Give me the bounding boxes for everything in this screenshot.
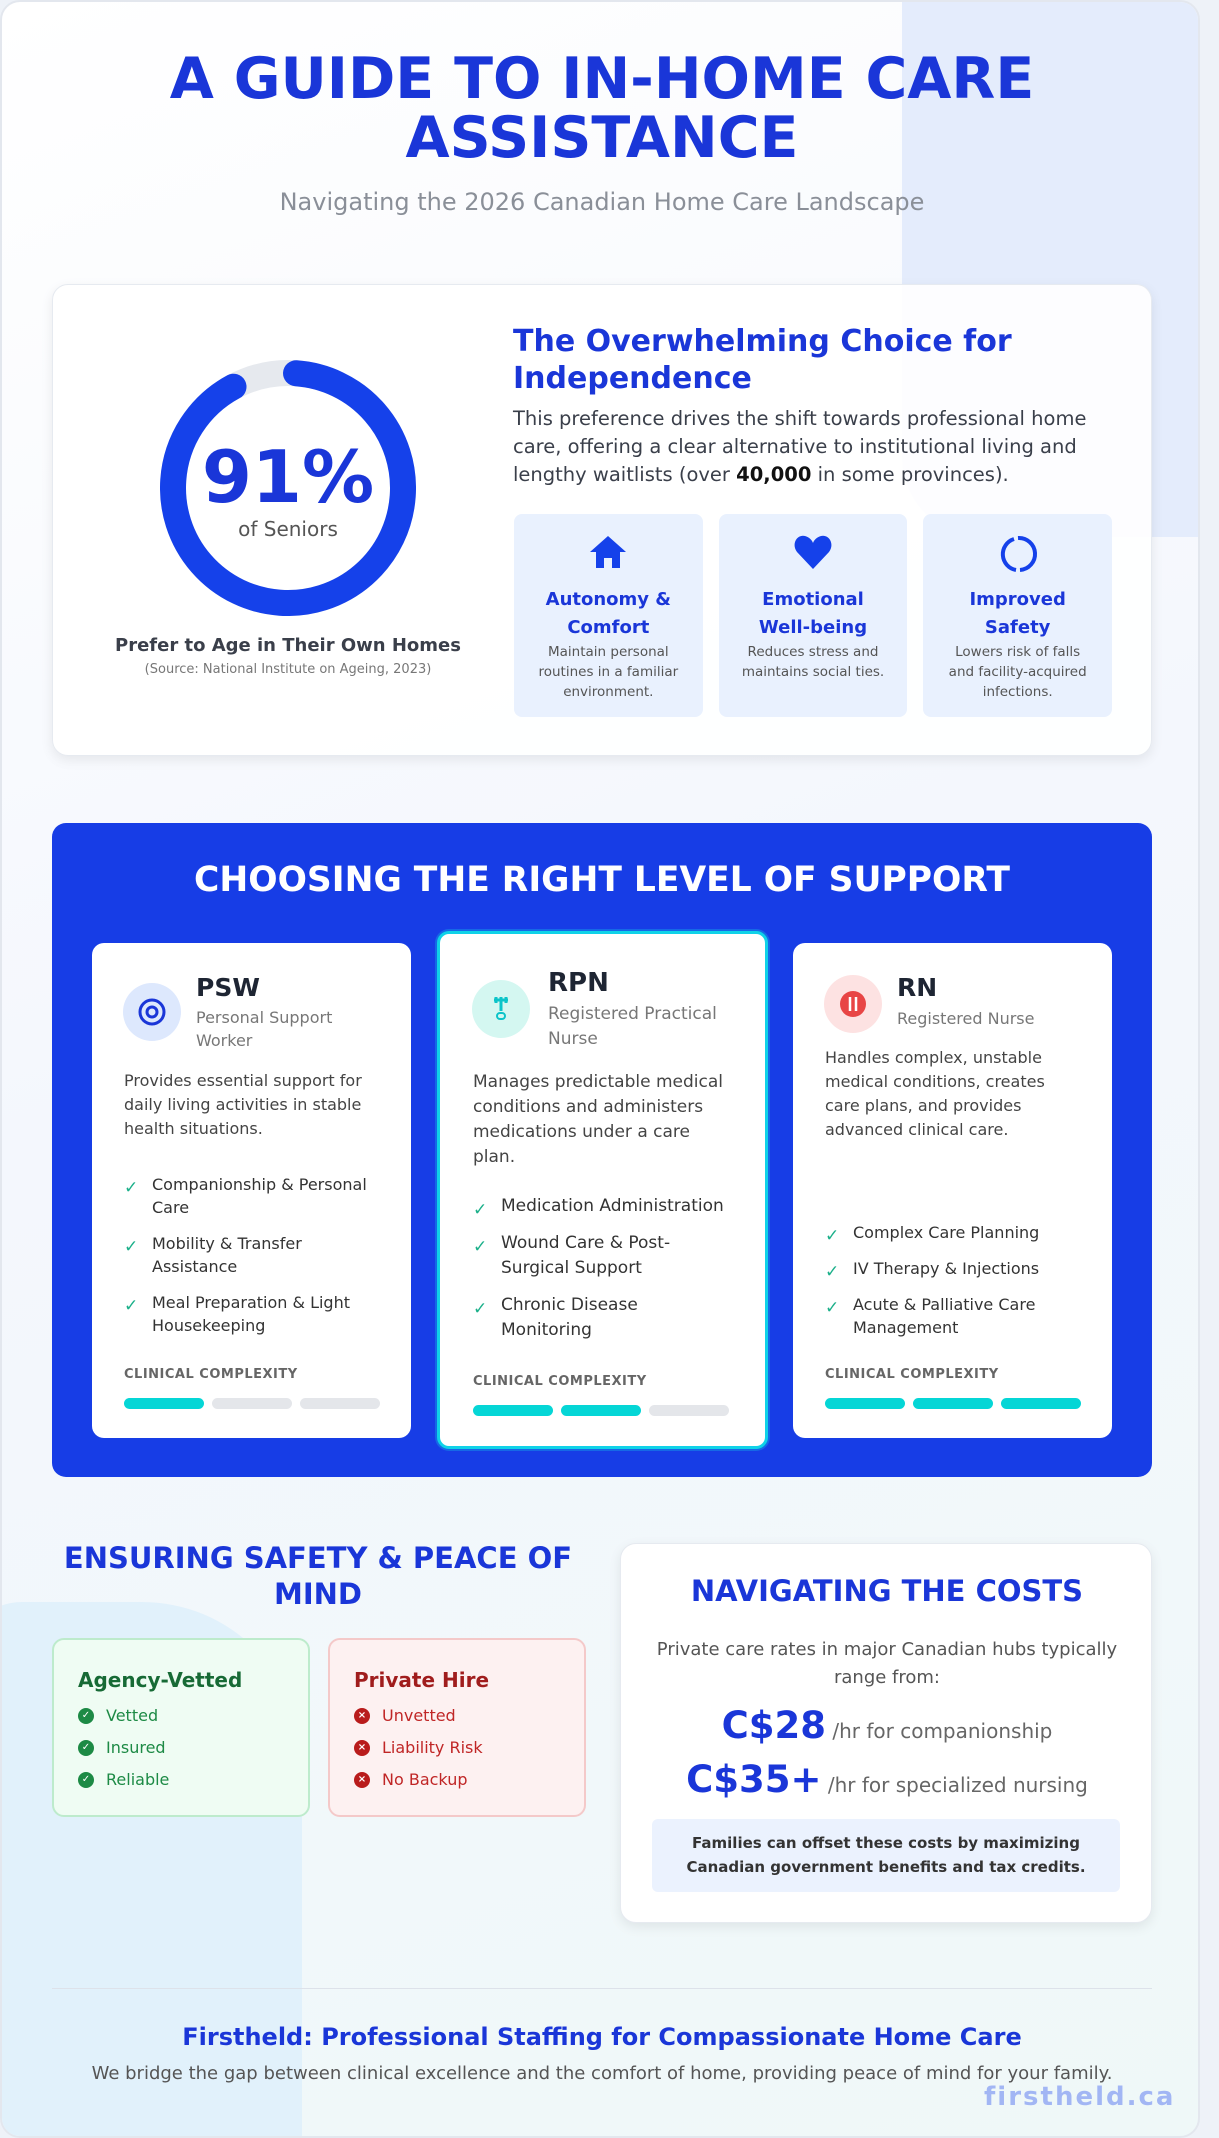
feature: safety: and facility-acquired: [949, 664, 1087, 680]
note: Canadian government benefits and tax credits.: [686, 1858, 1086, 1876]
panel: costs: [620, 1543, 1152, 1923]
feature: autonomy: Maintain personal: [548, 644, 669, 660]
box: private hire: [328, 1638, 586, 1817]
note: Families can offset these costs by maximizing: [692, 1834, 1080, 1852]
card: RPN: RPN: [548, 968, 609, 998]
donut chart 91%: of Seniors: [238, 517, 338, 541]
brand: firstheld.ca: [984, 2082, 1175, 2112]
icon: RN: [824, 975, 882, 1033]
card: RPN: Chronic Disease Monitoring: [501, 1295, 638, 1340]
box: private hire: Unvetted: [382, 1706, 456, 1725]
heading: safety: [64, 1541, 572, 1611]
panel: costs: Private care rates in major Canadian hubs typically range from:: [657, 1639, 1117, 1688]
feature: wellbeing: Reduces stress and: [748, 644, 878, 660]
card: RN: IV Therapy & Injections: [853, 1259, 1039, 1278]
box: agency-vetted: ✓: [82, 1774, 90, 1785]
box: private hire: ×: [358, 1742, 366, 1753]
card: RN: Complex Care Planning: [853, 1223, 1039, 1242]
costs heading: NAVIGATING THE COSTS: [691, 1574, 1083, 1608]
card: RN: Acute & Palliative Care Management: [853, 1295, 1035, 1337]
card: RPN: Manages predictable medical conditions and administers medications under a care plan.: [473, 1072, 723, 1167]
box: agency-vetted: [52, 1638, 310, 1817]
title: A GUIDE TO IN-HOME CARE: [170, 46, 1034, 112]
box: private hire: Private Hire: [354, 1668, 489, 1692]
footer title: Firstheld: Professional Staffing for Compassionate Home Care: [182, 2023, 1022, 2051]
feature: autonomy: Comfort: [567, 617, 649, 638]
heading: safety: ENSURING SAFETY & PEACE OF: [64, 1541, 572, 1575]
subtitle: Navigating the 2026 Canadian Home Care Landscape: [280, 188, 924, 216]
card: RN: RN: [897, 973, 937, 1002]
feature: wellbeing: [719, 514, 907, 717]
box: agency-vetted: Insured: [106, 1738, 166, 1757]
panel: independence stat: [52, 284, 1152, 756]
rate: C$35+: C$35+ /hr for specialized nursing: [686, 1758, 1088, 1801]
box: agency-vetted: ✓: [82, 1710, 90, 1721]
box: private hire: ×: [358, 1774, 366, 1785]
box: private hire: No Backup: [382, 1770, 468, 1789]
box: private hire: ×: [358, 1710, 366, 1721]
feature: wellbeing: maintains social ties.: [742, 664, 884, 680]
feature: autonomy: environment.: [563, 684, 653, 700]
note: [652, 1819, 1120, 1892]
section heading: CHOOSING THE RIGHT LEVEL OF SUPPORT: [194, 860, 1010, 900]
footer text: We bridge the gap between clinical excellence and the comfort of home, providing peace of mind for your family.: [92, 2063, 1112, 2084]
card: PSW: Personal Support: [196, 1008, 332, 1027]
icon: RPN: [472, 980, 530, 1038]
feature: autonomy: [514, 514, 703, 717]
box: agency-vetted: Vetted: [106, 1706, 158, 1725]
icon: PSW: [123, 983, 181, 1041]
feature: safety: Improved: [969, 589, 1066, 610]
box: agency-vetted: Agency-Vetted: [78, 1668, 242, 1692]
card: RPN: Registered Practical: [548, 1004, 717, 1024]
heading: The Overwhelming Choice for Independence: [513, 324, 1012, 396]
feature: safety: Lowers risk of falls: [955, 644, 1080, 660]
title: [170, 46, 1034, 171]
donut chart 91%: [160, 360, 416, 616]
panel: levels of support: [52, 823, 1152, 1477]
feature: safety: Safety: [985, 617, 1050, 638]
heading: safety: MIND: [274, 1577, 362, 1611]
card: PSW: [92, 943, 411, 1438]
card: PSW: Worker: [196, 1031, 252, 1050]
feature: wellbeing: Emotional: [762, 589, 864, 610]
title: ASSISTANCE: [406, 105, 798, 171]
card: PSW: CLINICAL COMPLEXITY: [124, 1367, 298, 1382]
card: PSW: Provides essential support for daily living activities in stable health situations.: [124, 1071, 362, 1138]
rate: C$28: C$28 /hr for companionship: [722, 1704, 1052, 1747]
card: PSW: Companionship & Personal Care: [152, 1175, 367, 1217]
card: PSW: PSW: [196, 973, 260, 1002]
stat caption: (Source: National Institute on Ageing, 2023): [145, 662, 431, 677]
feature: wellbeing: Well-being: [759, 617, 867, 638]
donut chart 91%: 91%: [202, 435, 374, 519]
card: RPN: [437, 931, 768, 1449]
stat caption: [115, 635, 461, 677]
card: RN: Handles complex, unstable medical conditions, creates care plans, and provides advanced clinical care.: [825, 1048, 1045, 1139]
card: PSW: Meal Preparation & Light Housekeeping: [152, 1293, 350, 1335]
feature: safety: [923, 514, 1112, 717]
card: RN: Registered Nurse: [897, 1009, 1034, 1028]
feature: autonomy: Autonomy &: [546, 589, 671, 610]
card: RPN: Nurse: [548, 1029, 598, 1049]
card: RN: CLINICAL COMPLEXITY: [825, 1367, 999, 1382]
paragraph: This preference drives the shift towards professional home care, offering a clear alternative to institutional living and lengthy waitlists (over 40,000 in some provinces).: [513, 407, 1086, 486]
card: RPN: CLINICAL COMPLEXITY: [473, 1374, 647, 1389]
card: RPN: Wound Care & Post-Surgical Support: [501, 1233, 670, 1278]
box: private hire: Liability Risk: [382, 1738, 483, 1757]
box: agency-vetted: ✓: [82, 1742, 90, 1753]
stat caption: Prefer to Age in Their Own Homes: [115, 635, 461, 656]
card: PSW: Mobility & Transfer Assistance: [152, 1234, 302, 1276]
card: RN: [793, 943, 1112, 1438]
feature: safety: infections.: [983, 684, 1053, 700]
feature: autonomy: routines in a familiar: [538, 664, 678, 680]
box: agency-vetted: Reliable: [106, 1770, 169, 1789]
card: RPN: Medication Administration: [501, 1196, 724, 1216]
feature boxes: [514, 514, 1112, 717]
